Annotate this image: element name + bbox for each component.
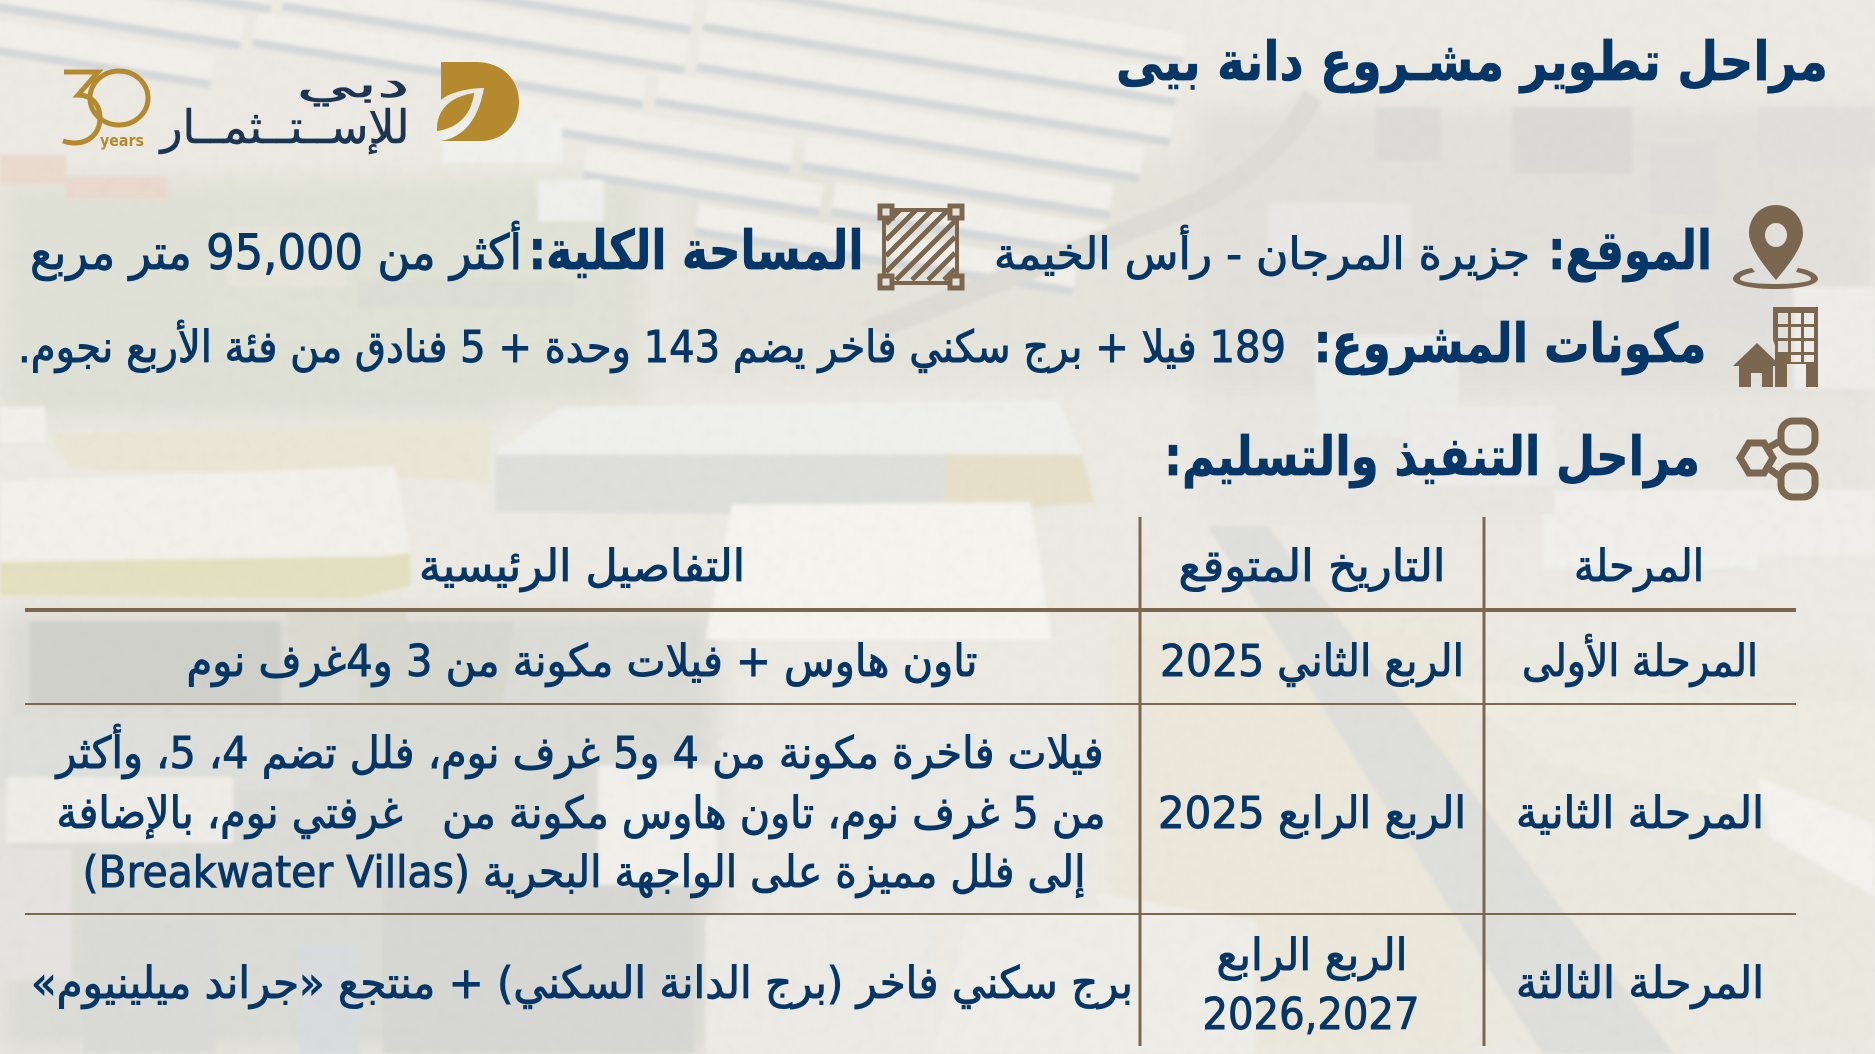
location value: جزيرة المرجان - رأس الخيمة xyxy=(994,225,1530,280)
row: phase one xyxy=(186,633,1758,687)
row: phase two: من 5 غرف نوم، تاون هاوس مكونة من غرفتي نوم، بالإضافة xyxy=(56,788,1106,839)
phases table xyxy=(25,517,1796,1046)
icon: gold D mark xyxy=(437,62,519,141)
row: phase three: الربع الرابع xyxy=(1216,930,1408,981)
bottom-left storage yards and tanks xyxy=(30,622,281,706)
table header: التفاصيل الرئيسية xyxy=(419,541,745,592)
30 years badge xyxy=(63,71,148,150)
row: phase three: برج سكني فاخر (برج الدانة السكني) + منتجع «جراند ميلينيوم» xyxy=(31,958,1133,1009)
components label: مكونات المشروع: xyxy=(1314,312,1706,375)
logo: Dubai Investments 30 years xyxy=(63,62,519,154)
row: phase two: المرحلة الثانية xyxy=(1516,788,1764,839)
row: phase one: الربع الثاني 2025 xyxy=(1160,636,1464,687)
table header: المرحلة xyxy=(1574,541,1704,592)
30 years badge: years xyxy=(100,131,144,150)
project components row xyxy=(18,307,1818,387)
row: phase two: إلى فلل مميزة على الواجهة البحرية (Breakwater Villas) xyxy=(82,847,1086,898)
icon: building and house xyxy=(1733,307,1818,387)
total area row xyxy=(30,206,962,288)
brand name arabic: دبي xyxy=(296,62,410,106)
road lower right xyxy=(1208,526,1674,1053)
icon: map pin xyxy=(1733,205,1818,289)
row: phase two xyxy=(55,724,1764,898)
implementation phases heading xyxy=(1164,421,1815,497)
row: phase three: المرحلة الثالثة xyxy=(1516,958,1764,1009)
icon: share nodes xyxy=(1740,421,1815,497)
row: phase one: المرحلة الأولى xyxy=(1522,633,1758,687)
table header xyxy=(419,541,1704,592)
large warehouses xyxy=(48,423,490,481)
components value: 189 فيلا + برج سكني فاخر يضم 143 وحدة + 5 فنادق من فئة الأربع نجوم. xyxy=(18,319,1286,373)
total area value: أكثر من 95,000 متر مربع xyxy=(30,221,522,281)
location row xyxy=(994,205,1818,289)
brand name arabic second line: للإســتــثمــار xyxy=(159,100,410,154)
row: phase three xyxy=(31,930,1764,1040)
location label: الموقع: xyxy=(1548,219,1712,282)
roads and middle structures xyxy=(861,90,1321,337)
row: phase two: فيلات فاخرة مكونة من 4 و5 غرف نوم، فلل تضم 4، 5، وأكثر xyxy=(55,724,1104,779)
table grid lines xyxy=(25,517,1796,1046)
total area label: المساحة الكلية: xyxy=(528,219,864,282)
icon: hatched plot xyxy=(880,206,962,288)
heading text: مراحل التنفيذ والتسليم: xyxy=(1164,425,1700,488)
warehouse rows top xyxy=(0,0,1187,298)
row: phase one: تاون هاوس + فيلات مكونة من 3 و4غرف نوم xyxy=(186,636,978,687)
row: phase three: 2026,2027 xyxy=(1202,989,1420,1040)
table header: التاريخ المتوقع xyxy=(1178,541,1446,592)
row: phase two: الربع الرابع 2025 xyxy=(1158,788,1466,839)
